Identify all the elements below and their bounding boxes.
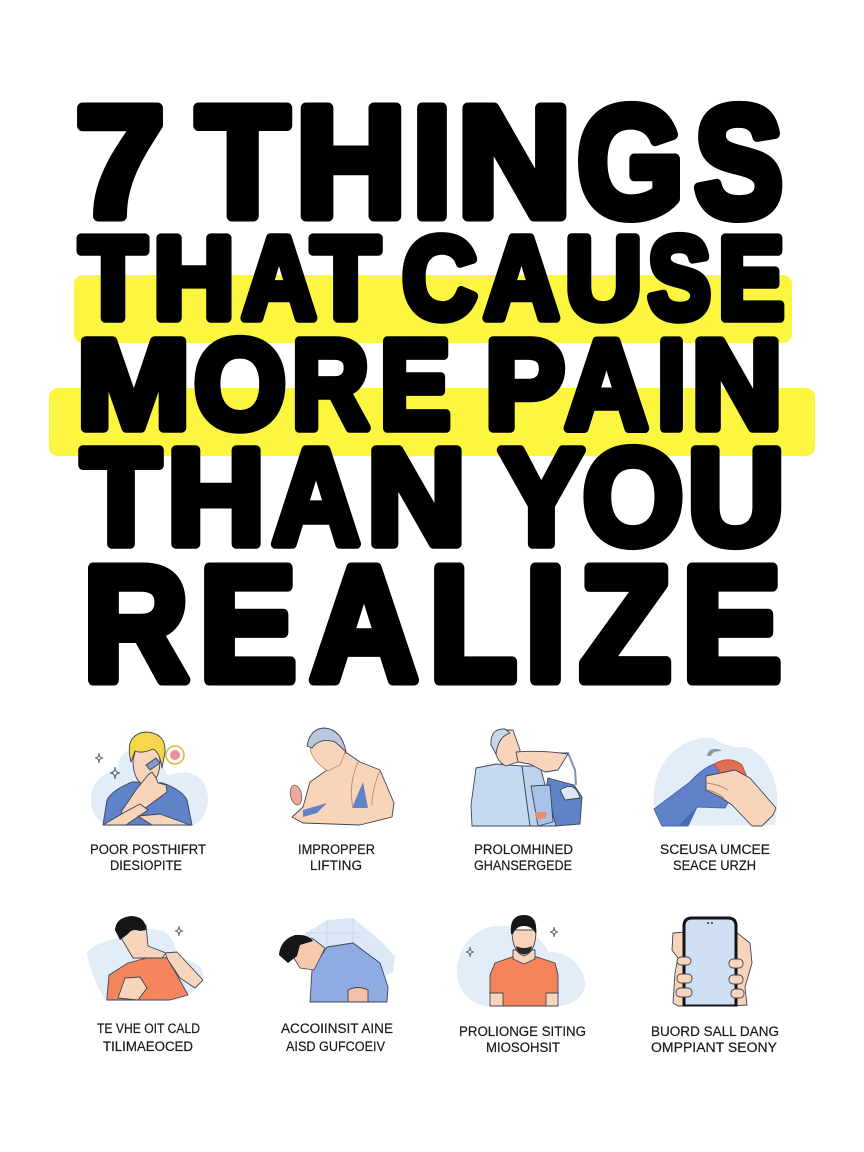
title: T xyxy=(81,420,161,573)
item 3: prolonged carrying xyxy=(471,729,582,873)
title: H xyxy=(296,75,406,250)
label xyxy=(298,842,375,873)
title: N xyxy=(457,75,572,250)
label: GHANSERGEDE xyxy=(474,858,572,873)
title: H xyxy=(167,420,265,573)
label: DIESIOPITE xyxy=(110,858,182,873)
icon: man standing in orange shirt xyxy=(457,915,585,1006)
label: SEACE URZH xyxy=(673,858,756,873)
label: OMPPIANT SEONY xyxy=(651,1040,777,1055)
title: E xyxy=(380,313,451,455)
item 6: hunched back xyxy=(279,918,395,1054)
label xyxy=(474,842,573,873)
highlight bar: that cause xyxy=(74,275,792,343)
icon: man with hand on face xyxy=(91,732,208,826)
label: TILIMAEOCED xyxy=(103,1039,193,1054)
title: E xyxy=(718,213,784,343)
label: POOR POSTHIFRT xyxy=(90,842,206,857)
title: A xyxy=(272,420,360,573)
title: U xyxy=(687,420,785,573)
label: SCEUSA UMCEE xyxy=(660,842,770,857)
title: Z xyxy=(580,534,670,715)
title: E xyxy=(199,534,296,715)
label: AISD GUFCOEIV xyxy=(286,1039,385,1054)
title: O xyxy=(583,420,684,573)
title: A xyxy=(242,213,316,343)
label xyxy=(97,1021,200,1054)
title: S xyxy=(648,213,711,343)
label xyxy=(651,1024,779,1055)
title: Y xyxy=(499,420,584,573)
icon: man with backpack xyxy=(471,729,582,826)
title: 7 xyxy=(76,75,164,250)
title: N xyxy=(692,313,782,455)
icon: hands holding phone xyxy=(672,918,752,1012)
label: LIFTING xyxy=(310,858,362,873)
label: MIOSOHSIT xyxy=(486,1040,560,1055)
item 4: knee pain xyxy=(654,738,777,873)
title: A xyxy=(310,534,418,715)
icon: man lifting baby xyxy=(289,728,394,825)
title: I xyxy=(525,534,566,715)
highlight bar: more pain xyxy=(49,388,815,456)
title: C xyxy=(402,213,477,343)
title: O xyxy=(194,313,286,455)
title: R xyxy=(292,313,369,455)
title: T xyxy=(312,213,379,343)
title: R xyxy=(83,534,188,715)
label: ACCOIINSIT AINE xyxy=(281,1021,393,1036)
icon: man bending forward xyxy=(279,918,395,1002)
title: T xyxy=(80,213,146,343)
title: U xyxy=(565,213,642,343)
title: I xyxy=(657,313,686,455)
title: N xyxy=(367,420,466,573)
title: S xyxy=(695,75,783,250)
label xyxy=(281,1021,393,1054)
title: H xyxy=(154,213,234,343)
title: M xyxy=(77,313,190,455)
title: L xyxy=(429,534,517,715)
item 1: poor posture xyxy=(90,732,208,873)
label xyxy=(90,842,206,873)
title: G xyxy=(577,75,684,250)
item 2: improper lifting xyxy=(289,728,394,873)
icon: man holding chest xyxy=(87,916,203,1000)
label: PROLOMHINED xyxy=(474,842,573,857)
title: E xyxy=(682,534,782,715)
title: T xyxy=(197,75,289,250)
title xyxy=(76,75,785,715)
item 5: neck and shoulder pain xyxy=(87,916,203,1054)
title: P xyxy=(485,313,565,455)
icon: hand on knee xyxy=(654,738,777,826)
title: A xyxy=(484,213,559,343)
label: BUORD SALL DANG xyxy=(651,1024,779,1039)
label xyxy=(660,842,770,873)
label: TE VHE OIT CALD xyxy=(97,1021,200,1036)
title: A xyxy=(565,313,648,455)
label: IMPROPPER xyxy=(298,842,375,857)
item 7: prolonged sitting xyxy=(457,915,586,1055)
title: I xyxy=(413,75,451,250)
label xyxy=(459,1024,586,1055)
item 8: phone use xyxy=(651,918,779,1055)
label: PROLIONGE SITING xyxy=(459,1024,586,1039)
